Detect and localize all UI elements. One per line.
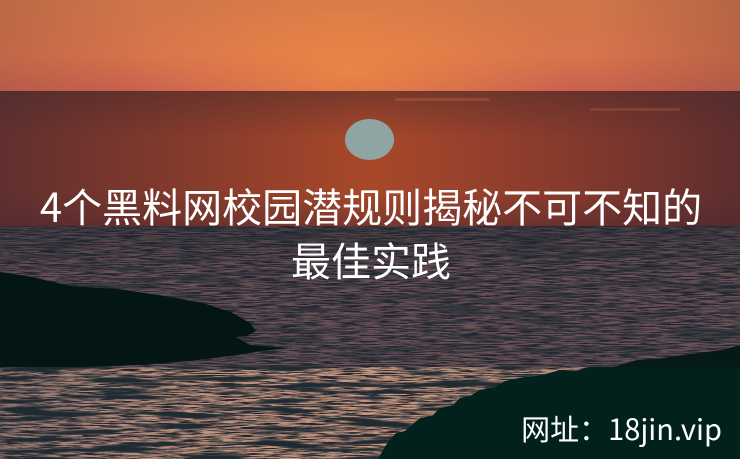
- right island silhouette: [378, 345, 740, 459]
- title: [40, 176, 702, 288]
- sea, bright lower part: [0, 367, 740, 459]
- sun: [345, 119, 394, 160]
- sea, dim upper part: [0, 226, 740, 367]
- left island silhouette: [0, 272, 288, 367]
- title: 4个黑料网校园潜规则揭秘不可不知的: [40, 176, 702, 234]
- website url: 网址：18jin.vip: [521, 407, 722, 449]
- sky: [0, 0, 740, 92]
- darkened upper band: [0, 91, 740, 226]
- title: 最佳实践: [291, 230, 451, 288]
